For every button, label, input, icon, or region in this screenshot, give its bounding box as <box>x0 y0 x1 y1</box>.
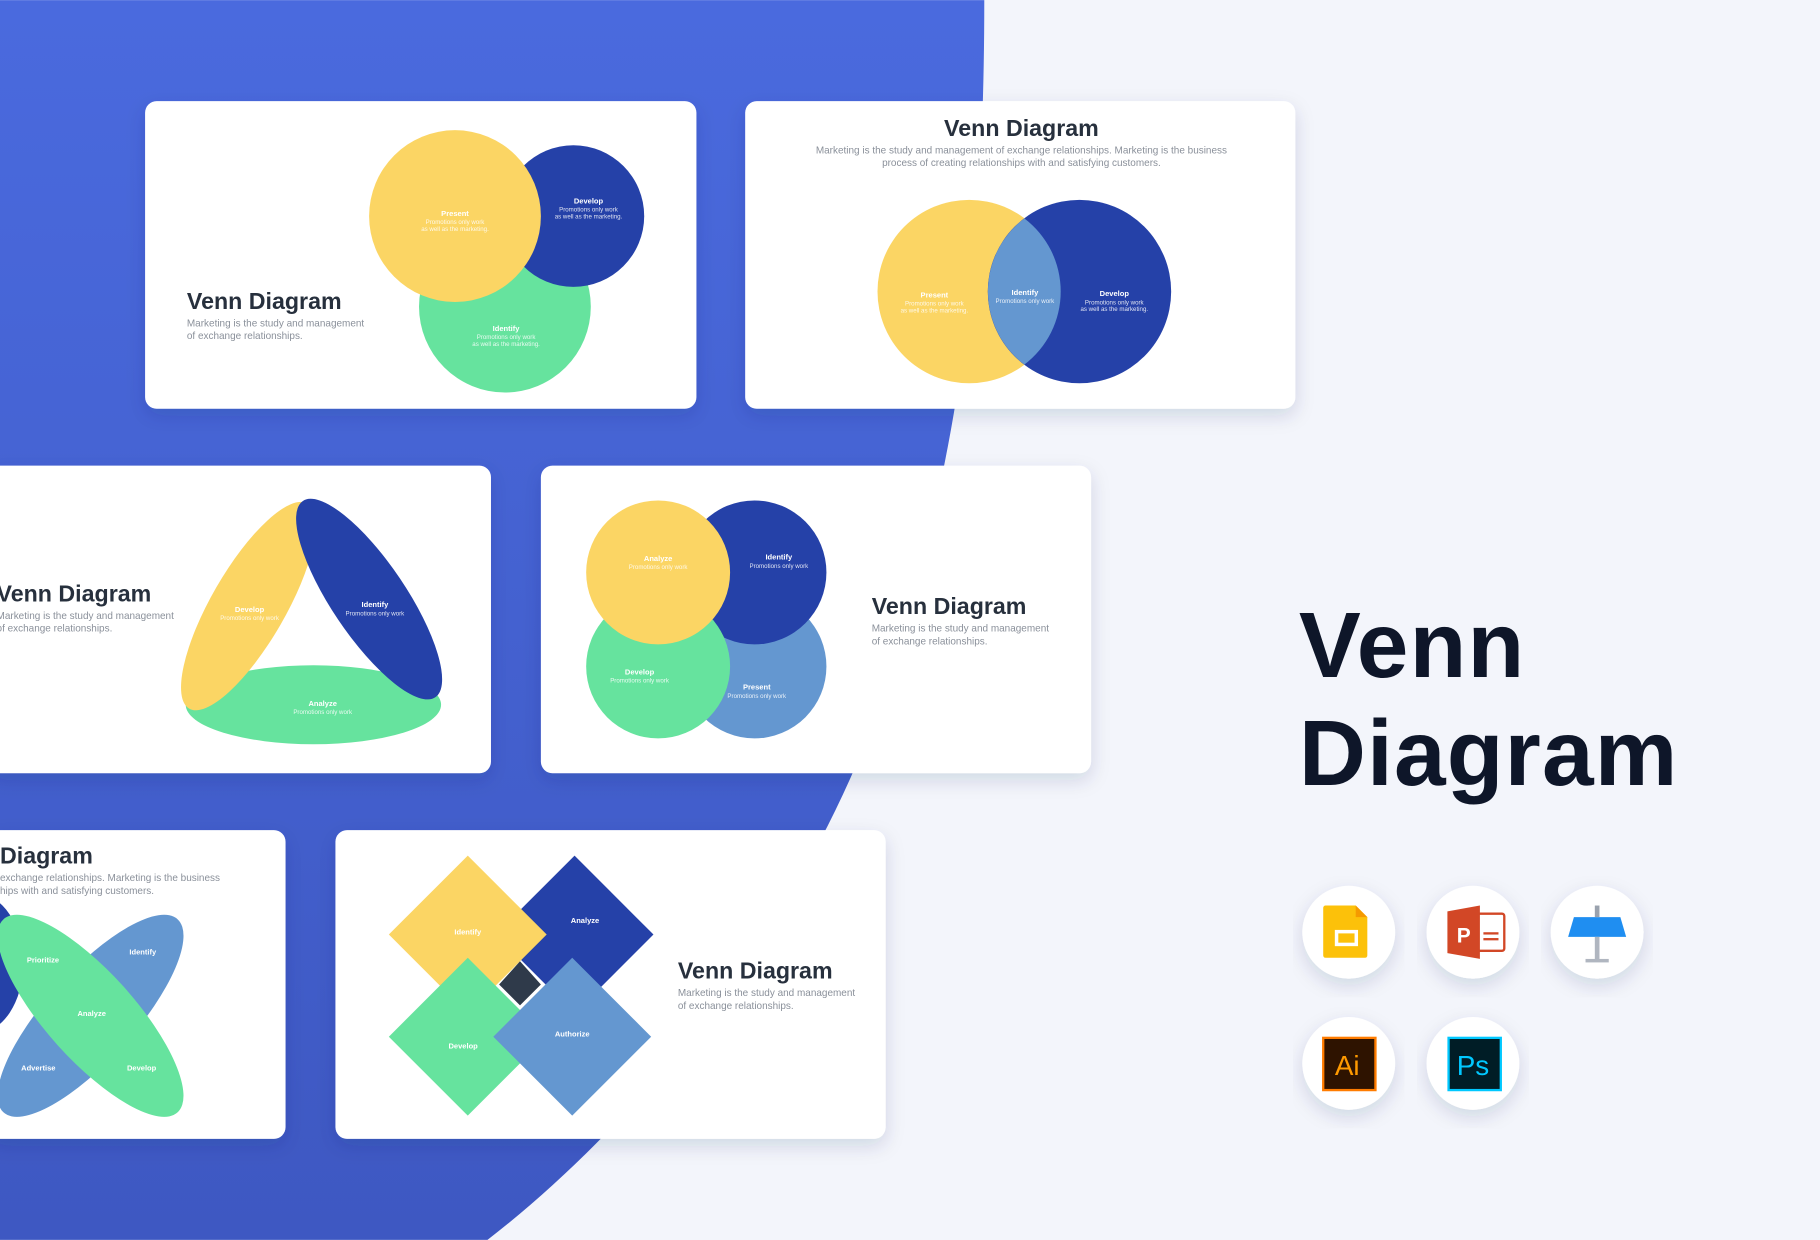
card 1: three-circle venn: Marketing is the study and management <box>187 318 364 329</box>
card 4: four-circle venn: Promotions only work <box>610 678 670 685</box>
card 2: two-circle venn: Present <box>921 290 949 299</box>
card 3: ellipse triangle: Develop <box>235 605 265 614</box>
card 2: two-circle venn: Develop <box>1100 289 1129 298</box>
card 1: three-circle venn: as well as the marketing. <box>555 213 623 220</box>
main title: Venn <box>1299 593 1525 697</box>
card 6: diamond venn: Marketing is the study and management <box>678 988 855 999</box>
card 6: diamond venn: Authorize <box>555 1030 590 1039</box>
card 2: two-circle venn: Promotions only work <box>1085 299 1145 306</box>
card 5: crossed ellipses: exchange relationships. Marketing is the business <box>0 873 220 884</box>
card 4: four-circle venn: Promotions only work <box>727 693 787 700</box>
card 3: ellipse triangle: Promotions only work <box>220 615 280 622</box>
card 4: four-circle venn: Promotions only work <box>749 563 809 570</box>
card 6: diamond venn <box>335 830 886 1139</box>
card 4: four-circle venn: Identify <box>765 553 793 562</box>
card 4: four-circle venn: Present <box>743 683 771 692</box>
card 3: ellipse triangle: Identify <box>362 600 389 609</box>
card 1: three-circle venn: Venn Diagram <box>187 288 342 314</box>
card 2: two-circle venn: Promotions only work <box>905 300 965 307</box>
main title: Diagram <box>1299 701 1678 805</box>
card 5: crossed ellipses: Diagram <box>0 843 93 869</box>
card 6: diamond venn: Identify <box>454 928 482 937</box>
card 1: three-circle venn: of exchange relationships. <box>187 331 303 342</box>
card 4: four-circle venn: Marketing is the study and management <box>872 624 1049 635</box>
icon: photoshop <box>1427 1017 1519 1110</box>
card 3: ellipse triangle: Marketing is the study and management <box>0 611 174 622</box>
card 2: two-circle venn: Identify <box>1012 288 1039 297</box>
card 4: four-circle venn: Develop <box>625 668 655 677</box>
card 5: crossed ellipses: hips with and satisfying customers. <box>0 886 154 897</box>
card 5: crossed ellipses: Identify <box>129 947 157 956</box>
card 1: three-circle venn: Promotions only work <box>477 334 536 341</box>
card 1: three-circle venn: Develop <box>574 196 604 205</box>
card 4: four-circle venn: of exchange relationships. <box>872 636 988 647</box>
card 1: three-circle venn: Promotions only work <box>426 219 485 226</box>
icon: photoshop: Ps <box>1457 1050 1489 1081</box>
card 1: three-circle venn: as well as the marketing. <box>421 226 489 233</box>
card 3: ellipse triangle: Analyze <box>308 699 337 708</box>
card 5: crossed ellipses: Analyze <box>77 1009 106 1018</box>
background blue shape <box>0 0 984 1240</box>
card 4: four-circle venn: Analyze <box>644 554 672 563</box>
card 2: two-circle venn: Marketing is the study and management of exchange relationships. Marketing is the business <box>816 145 1227 156</box>
card 6: diamond venn: Analyze <box>571 916 599 925</box>
card 3: ellipse triangle <box>0 466 491 773</box>
card 1: three-circle venn: Present <box>441 209 469 218</box>
icon: google slides <box>1302 886 1395 979</box>
card 4: four-circle venn: Venn Diagram <box>872 593 1026 619</box>
icon: powerpoint: P <box>1457 925 1471 948</box>
card 1: three-circle venn: as well as the marketing. <box>472 341 540 348</box>
card 5: crossed ellipses: Advertise <box>21 1063 55 1072</box>
main title <box>1299 593 1678 805</box>
icon: illustrator <box>1302 1017 1395 1110</box>
card 6: diamond venn: Develop <box>448 1041 478 1050</box>
card 2: two-circle venn: as well as the marketing. <box>901 307 968 314</box>
card 5: crossed ellipses <box>0 830 286 1142</box>
card 2: two-circle venn <box>745 101 1295 409</box>
card 5: crossed ellipses: Develop <box>127 1063 157 1072</box>
card 3: ellipse triangle: Promotions only work <box>346 610 405 617</box>
icon: powerpoint <box>1427 886 1519 979</box>
card 4: four-circle venn <box>541 466 1091 773</box>
card 2: two-circle venn: process of creating relationships with and satisfying customers. <box>882 158 1161 169</box>
card 2: two-circle venn: Promotions only work <box>996 298 1055 305</box>
card 6: diamond venn: Venn Diagram <box>678 958 833 984</box>
card 5: crossed ellipses: Prioritize <box>27 955 59 964</box>
card 4: four-circle venn: Promotions only work <box>629 564 688 571</box>
card 2: two-circle venn: as well as the marketing. <box>1080 306 1148 313</box>
card 3: ellipse triangle: Venn Diagram <box>0 580 151 606</box>
card 1: three-circle venn: Identify <box>493 324 520 333</box>
card 1: three-circle venn <box>145 101 696 409</box>
card 3: ellipse triangle: Promotions only work <box>293 709 353 716</box>
icon: keynote <box>1551 886 1644 979</box>
icon: illustrator: Ai <box>1335 1050 1360 1081</box>
card 2: two-circle venn: Venn Diagram <box>944 115 1099 141</box>
card 1: three-circle venn: Promotions only work <box>559 206 619 213</box>
card 6: diamond venn: of exchange relationships. <box>678 1001 794 1012</box>
